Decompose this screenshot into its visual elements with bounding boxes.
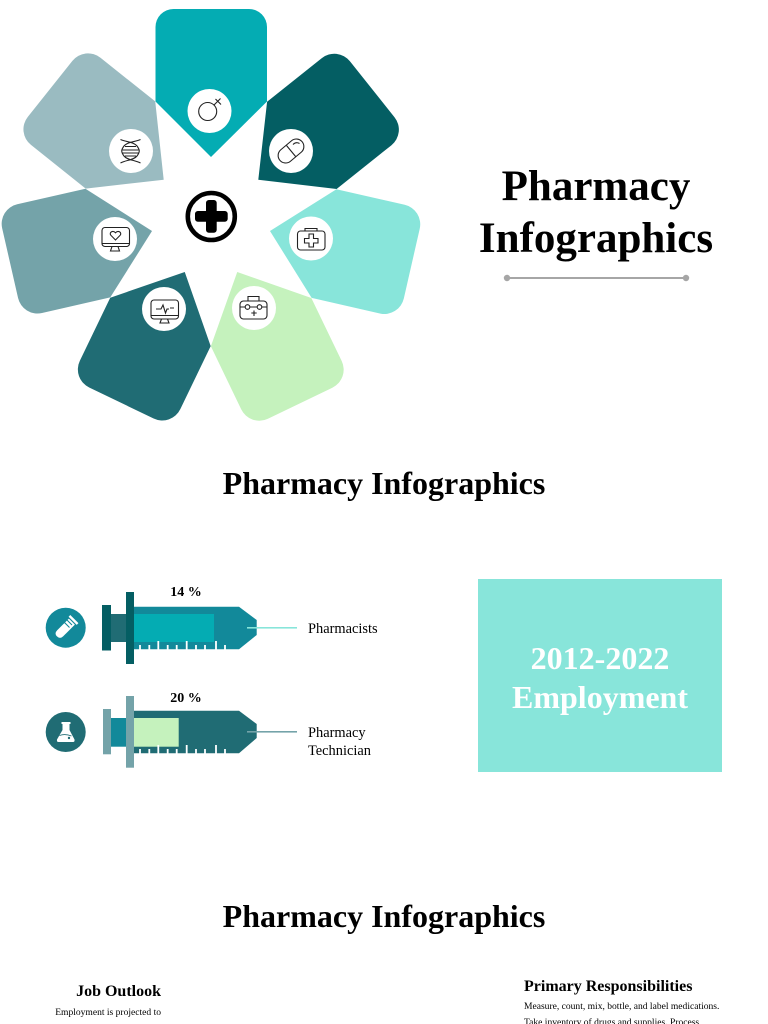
label: pharmacy technician: Technician [308, 742, 371, 758]
heading: primary responsibilities: Primary Responsibilities [524, 978, 692, 995]
syringe one [102, 592, 297, 664]
icon: toolbox [232, 286, 276, 330]
icon: dna helix [109, 129, 153, 173]
percent label: 20: 20 % [170, 691, 202, 706]
icon: pulse monitor [142, 287, 186, 331]
syringe two [103, 696, 297, 768]
label: pharmacy technician: Pharmacy [308, 725, 366, 741]
petal: teal top [156, 9, 267, 157]
petal: grey teal left [0, 176, 164, 317]
body: primary responsibilities: Measure, count, mix, bottle, and label medications. [524, 1001, 719, 1012]
title divider [504, 274, 690, 282]
section heading: employment: Pharmacy Infographics [223, 465, 545, 501]
body: job outlook: Employment is projected to [55, 1007, 161, 1018]
petal: aqua right [258, 177, 424, 318]
icon: flask badge [46, 712, 86, 752]
body: primary responsibilities [524, 1001, 719, 1024]
employment callout box [478, 579, 722, 772]
icon: first aid case [289, 216, 333, 260]
icon: gender symbol [188, 89, 232, 133]
icon: pill [269, 129, 313, 173]
main title: Infographics [479, 215, 713, 262]
label: pharmacists: Pharmacists [308, 621, 378, 637]
petal: light green bottom right [187, 248, 350, 427]
text block: job outlook [55, 983, 161, 1018]
main title: Pharmacy [502, 163, 690, 210]
syringe chart: pharmacists [46, 592, 297, 768]
petal: deep teal bottom left [71, 248, 235, 427]
employment callout box: Employment [512, 678, 688, 714]
icon: test tube badge [46, 608, 86, 648]
petal: pale grey teal upper left [15, 45, 199, 223]
heading: job outlook: Job Outlook [76, 983, 161, 1000]
main title [479, 163, 713, 262]
section heading: outlook: Pharmacy Infographics [223, 898, 545, 934]
petal: dark teal upper right [224, 46, 407, 224]
icon: heart monitor [93, 217, 137, 261]
label: pharmacy technician [308, 725, 371, 758]
text block: primary responsibilities [524, 978, 719, 1024]
employment callout box: 2012-2022 [531, 640, 669, 676]
icon: central medical cross [188, 193, 235, 240]
percent label: 14: 14 % [170, 585, 202, 600]
flower diagram [2, 9, 420, 421]
